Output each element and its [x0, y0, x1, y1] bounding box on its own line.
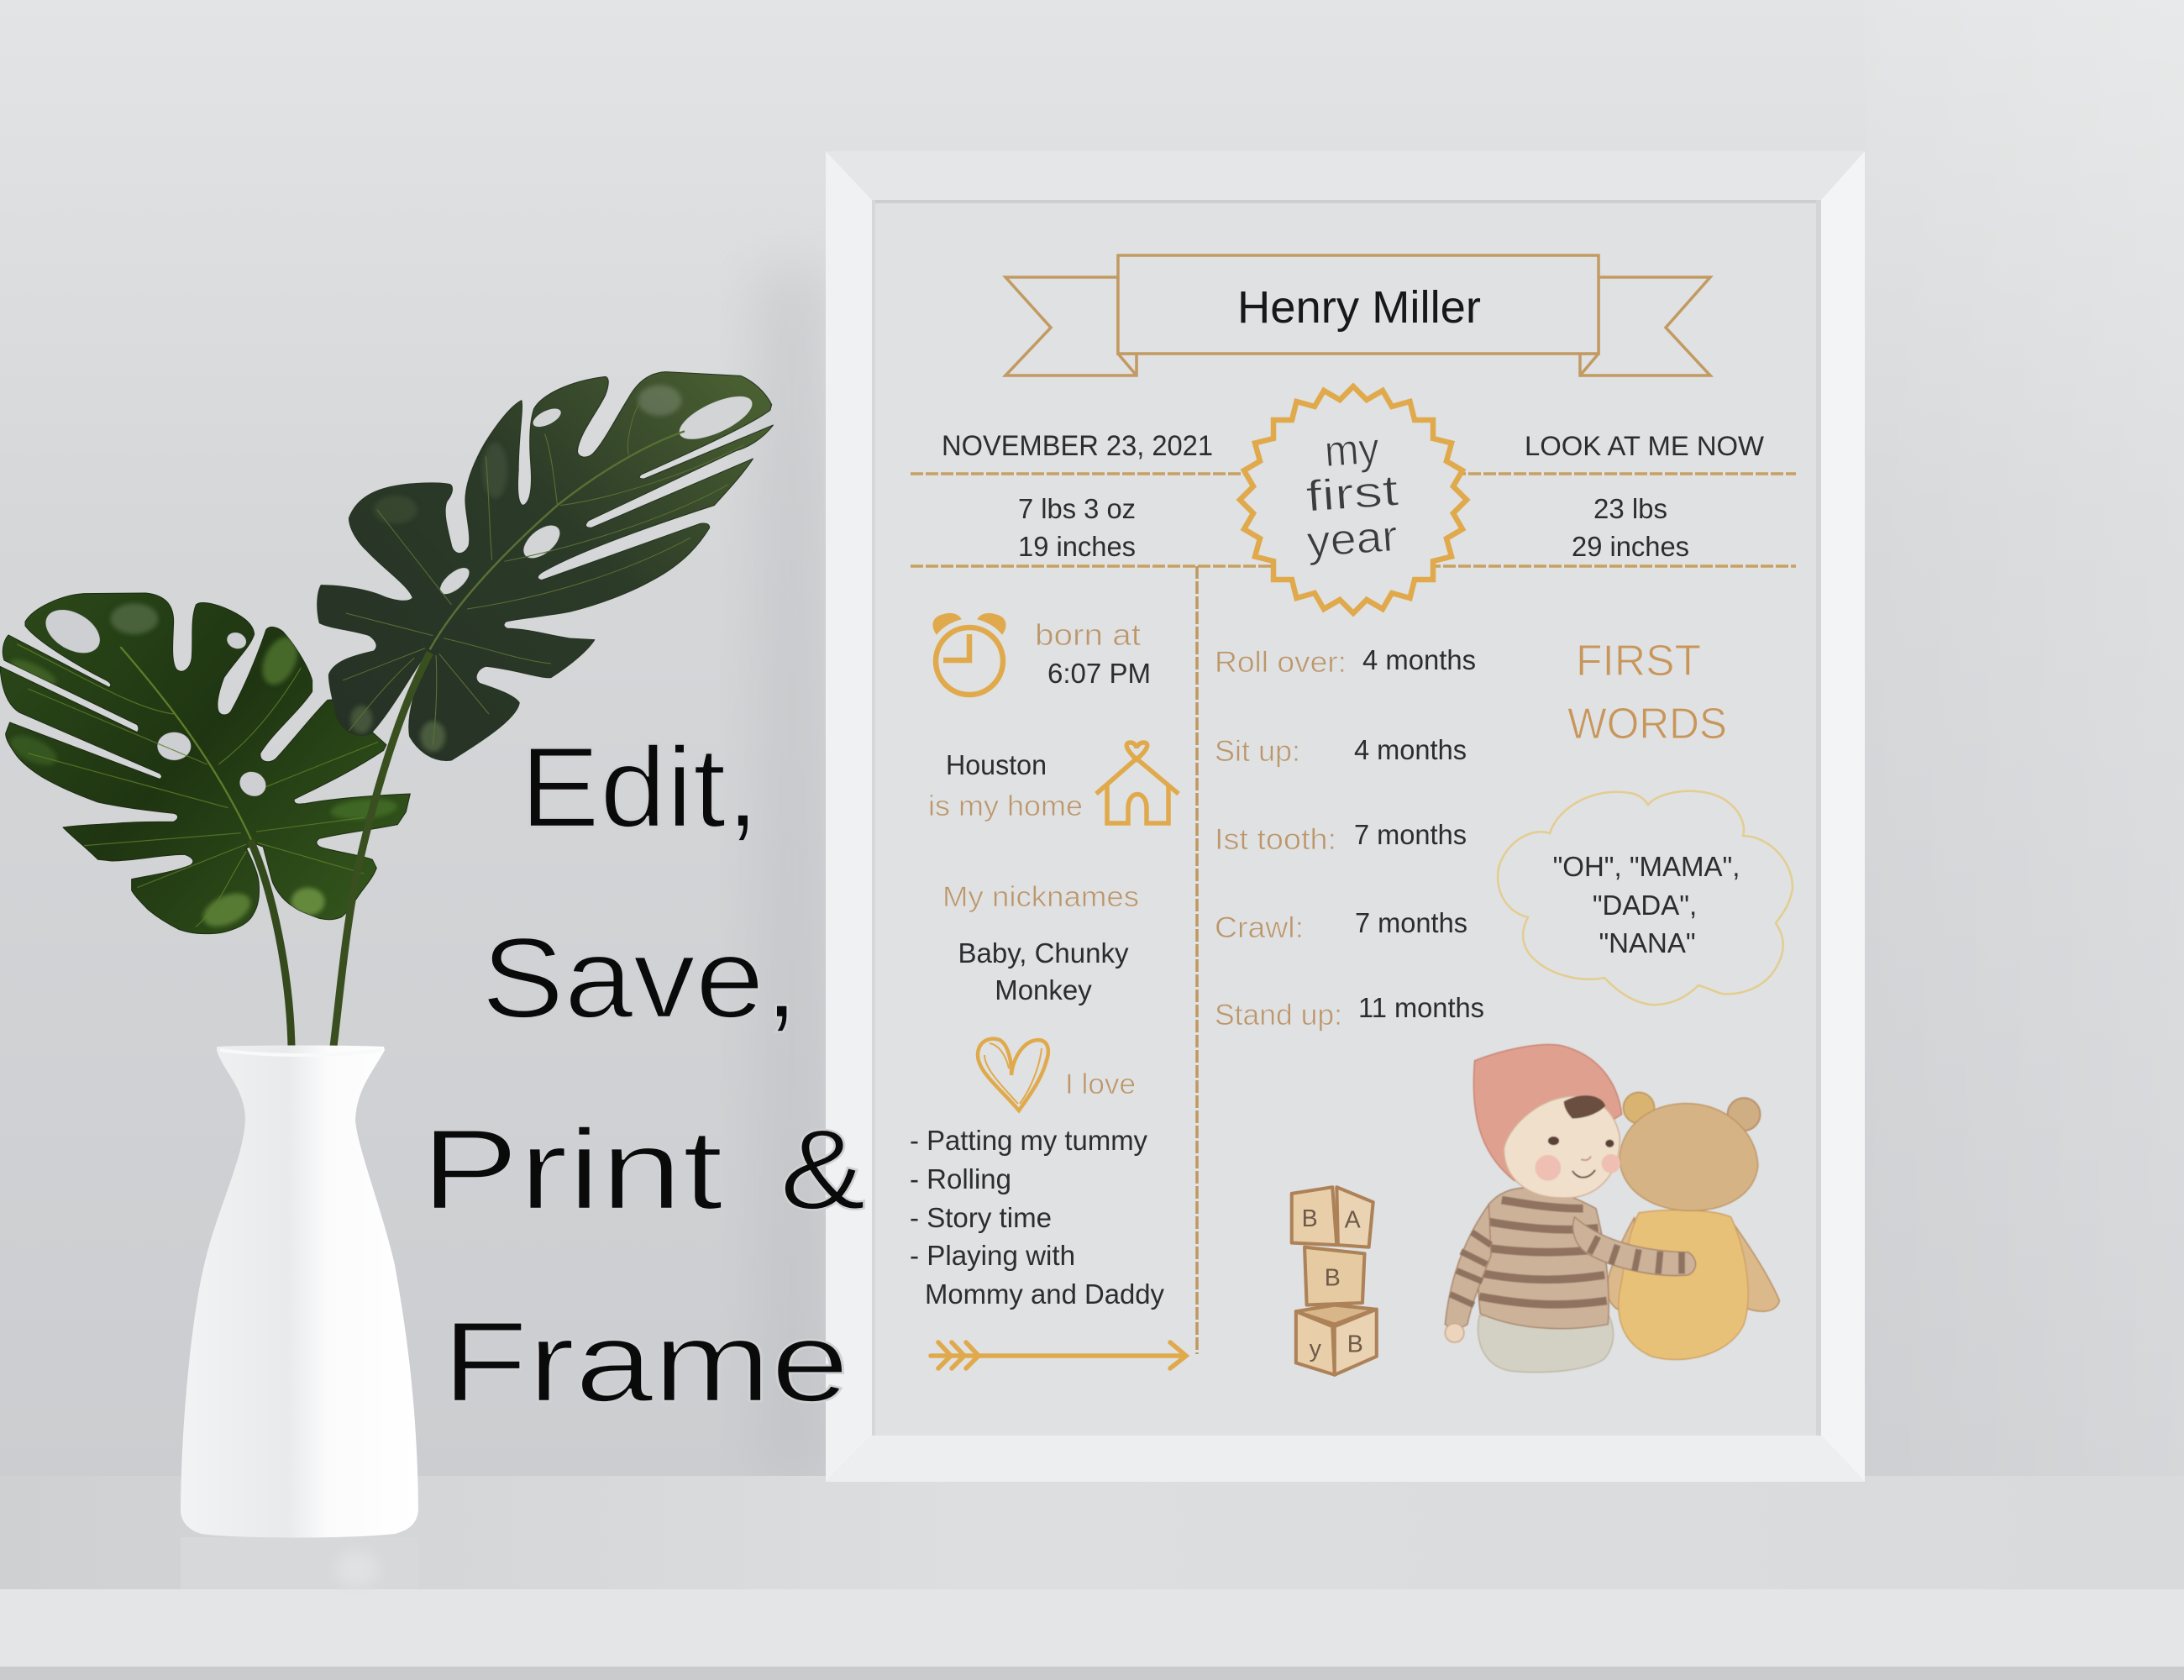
milestone: sit up: [1215, 734, 1467, 768]
picture frame: [826, 151, 1865, 1482]
icon: house: [1096, 743, 1179, 823]
leaf highlights: [350, 385, 681, 752]
born at text: born at: [1035, 617, 1141, 652]
illustration: baby blocks: A: [1345, 1207, 1361, 1234]
illustration: baby blocks: B: [1347, 1331, 1363, 1358]
loves list: - Rolling: [910, 1163, 1011, 1194]
milestone: sit up: 4 months: [1354, 734, 1467, 765]
badge: my first year: [1240, 386, 1467, 613]
plant and vase: [0, 372, 773, 1537]
loves list: - Playing with: [910, 1240, 1075, 1271]
birth stats: [1018, 493, 1136, 562]
badge: my first year: first: [1305, 466, 1400, 522]
tagline text: Print: [421, 1105, 723, 1233]
leaf holes: [435, 388, 759, 598]
name heading: Henry Miller: [1237, 282, 1481, 333]
current stats: [1572, 493, 1689, 562]
upper leaf stem: [333, 653, 430, 1047]
hometown text: is my home: [928, 790, 1083, 822]
milestone: sit up: Sit up:: [1215, 735, 1300, 768]
first words heading: [1567, 637, 1727, 748]
tagline text: [421, 723, 866, 1425]
upper monstera leaf: [318, 372, 773, 760]
leaf veins: [17, 644, 378, 927]
illustration: baby blocks: B: [1325, 1265, 1341, 1292]
milestone: first tooth: Ist tooth:: [1215, 823, 1336, 856]
icon: heart: [978, 1039, 1048, 1110]
milestone: stand up: Stand up:: [1215, 999, 1342, 1032]
loves list: - Patting my tummy: [910, 1125, 1147, 1156]
milestone: crawl: 7 months: [1355, 907, 1467, 938]
milestone: stand up: 11 months: [1358, 992, 1484, 1023]
badge: my first year: year: [1305, 512, 1399, 567]
born at text: [1035, 617, 1151, 689]
illustration: teddy bear: [1606, 1093, 1779, 1360]
illustration: baby blocks: [1292, 1187, 1377, 1375]
loves list: [910, 1125, 1164, 1310]
hometown text: Houston: [946, 749, 1047, 780]
leaf holes: [39, 601, 270, 801]
current stats: 29 inches: [1572, 531, 1689, 562]
milestone: stand up: [1215, 992, 1484, 1032]
tagline text: Save,: [481, 914, 799, 1042]
milestone: crawl: Crawl:: [1215, 911, 1304, 944]
speech cloud: [1498, 791, 1793, 1005]
lower monstera leaf: [0, 593, 410, 934]
first words text: "OH", "MAMA",: [1553, 851, 1740, 882]
vase: [181, 1045, 418, 1537]
first words text: "NANA": [1599, 927, 1696, 958]
shelf: [0, 1476, 2184, 1680]
nicknames: My nicknames: [942, 881, 1139, 913]
current stats: 23 lbs: [1593, 493, 1667, 524]
illustration: baby blocks: y: [1310, 1336, 1322, 1362]
milestone: roll over: 4 months: [1362, 644, 1476, 675]
tagline text: Frame: [442, 1298, 849, 1425]
first words heading: WORDS: [1567, 700, 1727, 748]
milestone: first tooth: 7 months: [1354, 819, 1467, 850]
illustration: baby: [1445, 1045, 1695, 1373]
tagline text: Edit,: [520, 723, 759, 851]
born at text: 6:07 PM: [1047, 658, 1151, 689]
icon: alarm clock: [933, 613, 1005, 695]
birth date heading: NOVEMBER 23, 2021: [942, 430, 1213, 462]
milestone: crawl: [1215, 907, 1467, 944]
tagline text: &: [780, 1105, 866, 1233]
badge: my first year: my: [1323, 424, 1381, 476]
nicknames: Baby, Chunky: [958, 937, 1129, 969]
milestone: roll over: [1215, 644, 1476, 679]
hometown text: [928, 749, 1083, 822]
loves list: - Story time: [910, 1202, 1052, 1233]
nicknames: Monkey: [995, 974, 1092, 1005]
birth stats: 19 inches: [1018, 531, 1136, 562]
first words heading: FIRST: [1576, 637, 1701, 685]
leaf highlights: [6, 603, 398, 933]
nicknames: [942, 881, 1139, 1005]
leaf veins: [343, 401, 743, 745]
first words text: [1553, 851, 1740, 958]
illustration: baby blocks: B: [1302, 1205, 1318, 1232]
milestone: first tooth: [1215, 819, 1467, 856]
birth stats: 7 lbs 3 oz: [1018, 493, 1136, 524]
lower leaf stem: [250, 840, 291, 1047]
arrow: [931, 1342, 1186, 1368]
dashed divider lines: [911, 474, 1796, 1354]
first words text: "DADA",: [1593, 890, 1697, 921]
look at me now heading: LOOK AT ME NOW: [1525, 431, 1765, 461]
milestone: roll over: Roll over:: [1215, 646, 1347, 679]
I love label: I love: [1065, 1068, 1136, 1100]
name banner: [1005, 255, 1710, 375]
loves list: Mommy and Daddy: [925, 1278, 1164, 1310]
